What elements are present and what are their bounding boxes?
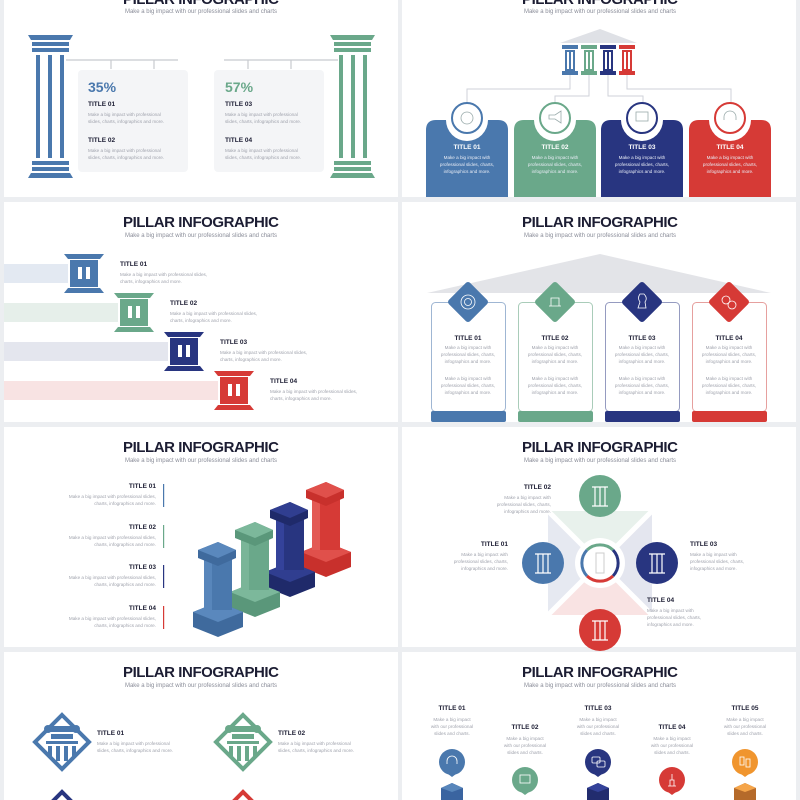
text: title 02 [278,730,354,753]
heading: PILLAR INFOGRAPHIC [522,664,678,681]
text list: charts, infographics and more. [94,582,156,587]
column 4 [651,724,693,795]
text blocks: Make a big impact with professional slides, [220,350,307,355]
text blocks: TITLE 03 [220,339,247,346]
text list: Make a big impact with professional slides, [69,535,156,540]
card 4: Make a big impact with [706,376,753,381]
text blocks: infographics and more. [647,622,694,627]
text blocks: Make a big impact with [647,608,694,613]
card 3: TITLE 03 [628,144,656,151]
card 1: TITLE 01 [454,335,482,342]
card 3: Make a big impact with [619,376,666,381]
icon: pillar 04 [214,371,254,410]
card 2 [514,103,596,197]
card 3 [601,103,683,197]
text list: charts, infographics and more. [94,623,156,628]
text blocks: Make a big impact with [504,495,551,500]
text blocks: TITLE 01 [120,261,147,268]
column 2 [504,724,546,795]
text: title 01 [97,730,173,753]
circle icons [522,475,678,651]
card 1: professional slides, charts, [440,162,494,167]
card: 35%: Make a big impact with professional [88,112,161,117]
iso pillar green [230,522,280,617]
column 4: Make a big impact [653,736,691,741]
icon: green diamond pillar [216,715,270,769]
text blocks: professional slides, charts, [454,559,508,564]
panel: staircase pillars with bars [4,202,398,422]
icon: pillar 01 [64,254,104,293]
card: 35%: TITLE 01 [88,101,115,108]
card 2: Make a big impact with [532,345,579,350]
card: 35%: slides, charts, infographics and more. [88,119,164,124]
column 5: TITLE 05 [731,705,759,712]
text blocks: TITLE 04 [647,597,674,604]
column 3 [577,705,619,800]
text list: TITLE 03 [129,564,156,571]
icon: pillar 03 [164,332,204,371]
text blocks: TITLE 02 [524,484,551,491]
icon: blue diamond pillar [35,715,89,769]
card 4: infographics and more. [707,169,753,174]
text: title 02: TITLE 02 [278,730,305,737]
card: 57%: Make a big impact with professional [225,112,298,117]
card 3: infographics and more. [619,359,665,364]
card: 57%: slides, charts, infographics and more. [225,119,301,124]
text: title 01: Make a big impact with professional [97,741,170,746]
column 3: with our professional [577,724,619,729]
iso pillar blue [193,542,243,637]
card 2: TITLE 02 [541,335,569,342]
panel: roof with outlined cards: Make a big impact with our professional slides and charts [524,233,676,239]
heading: PILLAR INFOGRAPHIC [123,439,279,456]
text list: TITLE 02 [129,524,156,531]
column 1 [431,705,473,800]
card 2: infographics and more. [532,390,578,395]
text blocks: Make a big impact with professional slides, [270,389,357,394]
icon: four small pillars [562,45,635,75]
text blocks: infographics and more. [504,509,551,514]
text blocks: TITLE 01 [481,541,508,548]
card 1: infographics and more. [445,359,491,364]
card 1: infographics and more. [444,169,490,174]
card: 57% [214,70,324,172]
column 1: slides and charts. [434,731,470,736]
heading: PILLAR INFOGRAPHIC [123,664,279,681]
card 3: professional slides, charts, [615,352,669,357]
card 2: professional slides, charts, [528,162,582,167]
column 5 [724,705,766,800]
column 2: with our professional [504,743,546,748]
card 2: Make a big impact with [532,155,579,160]
text: title 02: slides, charts, infographics and more. [278,748,354,753]
iso pillar navy [265,502,315,597]
column 3: slides and charts. [580,731,616,736]
card 2: infographics and more. [532,169,578,174]
card 1: Make a big impact with [445,376,492,381]
panel: isometric pillars [4,427,398,647]
bars [4,264,218,400]
text blocks: professional slides, charts, [690,559,744,564]
text list [69,483,164,629]
card 4: Make a big impact with [706,345,753,350]
card 4: TITLE 04 [715,335,743,342]
text list: charts, infographics and more. [94,501,156,506]
panel: isometric pillars: Make a big impact with our professional slides and charts [125,458,277,464]
card 4: professional slides, charts, [703,162,757,167]
text list: TITLE 01 [129,483,156,490]
icon: pillar 02 [114,293,154,332]
text blocks: professional slides, charts, [497,502,551,507]
column 1: with our professional [431,724,473,729]
icon: blue pillar [28,35,73,178]
card 4 [689,103,771,197]
card 3: TITLE 03 [628,335,656,342]
card: 35%: TITLE 02 [88,137,115,144]
background quadrants [546,509,654,617]
text blocks: charts, infographics and more. [270,396,332,401]
text blocks: Make a big impact with [690,552,737,557]
panel: five pin pillars: Make a big impact with our professional slides and charts [524,683,676,689]
panel: pillars with percentages [4,0,398,197]
column 4: slides and charts. [654,750,690,755]
card: 57%: TITLE 03 [225,101,252,108]
text list: TITLE 04 [129,605,156,612]
icon: temple roof [560,29,637,43]
card 3 [605,281,680,422]
card 2: professional slides, charts, [528,383,582,388]
text list: Make a big impact with professional slides, [69,494,156,499]
text: title 02: Make a big impact with professional [278,741,351,746]
text blocks [454,484,744,627]
card 2: infographics and more. [532,359,578,364]
panel: five pin pillars [402,652,796,800]
text list: Make a big impact with professional slides, [69,575,156,580]
column 1: Make a big impact [433,717,471,722]
panel: circular pillar diagram [402,427,796,651]
column 2: slides and charts. [507,750,543,755]
card: 57%: Make a big impact with professional [225,148,298,153]
card: 57%: TITLE 04 [225,137,252,144]
text blocks: Make a big impact with professional slides, [170,311,257,316]
heading: PILLAR INFOGRAPHIC [522,439,678,456]
panel: diamond pillar icons: Make a big impact with our professional slides and charts [125,683,277,689]
card: 35%: 35% [88,79,117,95]
text blocks: TITLE 03 [690,541,717,548]
card: 35%: Make a big impact with professional [88,148,161,153]
card 3: infographics and more. [619,390,665,395]
roof [427,254,771,293]
card 2: Make a big impact with [532,376,579,381]
column 4: TITLE 04 [658,724,686,731]
column 3: TITLE 03 [584,705,612,712]
connector lines left [66,60,178,69]
card 2: professional slides, charts, [528,352,582,357]
icon: partial navy and red diamonds [44,792,261,800]
panel: temple with four cards: Make a big impact with our professional slides and charts [524,9,676,15]
text blocks: infographics and more. [461,566,508,571]
text blocks: charts, infographics and more. [120,279,182,284]
panel: pillars with percentages: Make a big impact with our professional slides and charts [125,9,277,15]
card 2 [518,281,593,422]
text blocks: charts, infographics and more. [170,318,232,323]
text list: Make a big impact with professional slides, [69,616,156,621]
card 4: professional slides, charts, [702,383,756,388]
card 4 [692,281,767,422]
text blocks: TITLE 04 [270,378,297,385]
text blocks: Make a big impact with professional slides, [120,272,207,277]
card 1: professional slides, charts, [441,383,495,388]
connector lines right [224,60,338,69]
connector lines [467,75,731,104]
column 4: with our professional [651,743,693,748]
card 4: TITLE 04 [716,144,744,151]
card 4: professional slides, charts, [702,352,756,357]
icon: green pillar [330,35,375,178]
card 1: professional slides, charts, [441,352,495,357]
card 3: professional slides, charts, [615,162,669,167]
column 2: Make a big impact [506,736,544,741]
panel: circular pillar diagram: Make a big impact with our professional slides and charts [524,458,676,464]
text: title 01: TITLE 01 [97,730,124,737]
column 1: TITLE 01 [438,705,466,712]
center ring [582,545,618,581]
card 1 [431,281,506,422]
text blocks: professional slides, charts, [647,615,701,620]
panel: temple with four cards [402,0,796,197]
card 4: infographics and more. [706,359,752,364]
card 4: infographics and more. [706,390,752,395]
card: 57%: slides, charts, infographics and more. [225,155,301,160]
column 5: Make a big impact [726,717,764,722]
text: title 01: slides, charts, infographics and more. [97,748,173,753]
card: 35% [78,70,188,172]
card: 35%: slides, charts, infographics and more. [88,155,164,160]
panel: staircase pillars with bars: Make a big impact with our professional slides and charts [125,233,277,239]
card 2: TITLE 02 [541,144,569,151]
text blocks: infographics and more. [690,566,737,571]
card 3: Make a big impact with [619,155,666,160]
text blocks: Make a big impact with [461,552,508,557]
card 3: Make a big impact with [619,345,666,350]
text blocks: TITLE 02 [170,300,197,307]
text blocks: charts, infographics and more. [220,357,282,362]
heading: PILLAR INFOGRAPHIC [522,214,678,231]
panel: diamond pillar icons [4,652,398,800]
text blocks [120,261,357,401]
card 1: TITLE 01 [453,144,481,151]
card: 57%: 57% [225,79,254,95]
column 2: TITLE 02 [511,724,539,731]
column 5: slides and charts. [727,731,763,736]
column 5: with our professional [724,724,766,729]
card 3: infographics and more. [619,169,665,174]
card 1: infographics and more. [445,390,491,395]
card 1: Make a big impact with [445,345,492,350]
card 1: Make a big impact with [444,155,491,160]
column 3: Make a big impact [579,717,617,722]
card 1 [426,103,508,197]
heading: PILLAR INFOGRAPHIC [123,214,279,231]
panel: roof with outlined cards [402,202,796,422]
iso pillar red [301,482,351,577]
card 4: Make a big impact with [707,155,754,160]
text list: charts, infographics and more. [94,542,156,547]
card 3: professional slides, charts, [615,383,669,388]
